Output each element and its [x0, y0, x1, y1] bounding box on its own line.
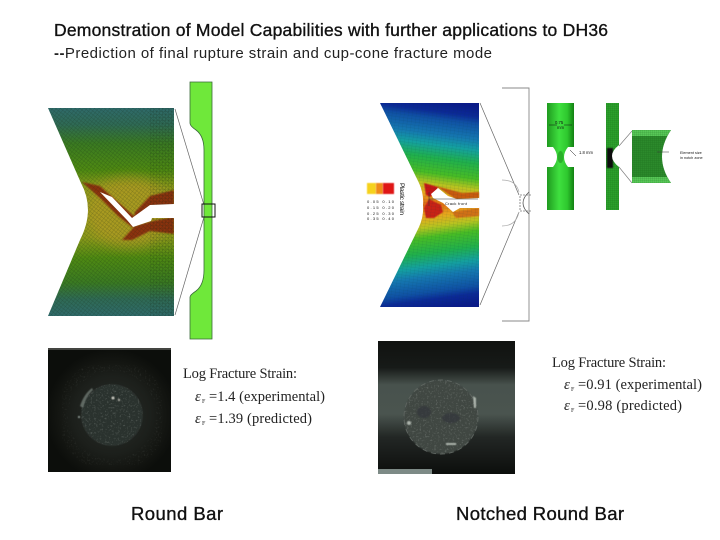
panel: notched round bar simulation: [367, 88, 703, 321]
plastic strain legend: 0.35 0.40: [367, 216, 395, 221]
round bar fracture strain text: =1.4 (experimental): [209, 389, 325, 405]
label: round bar: Round Bar: [131, 503, 223, 524]
notched round bar fracture strain text: Log Fracture Strain:: [552, 355, 666, 371]
title: Demonstration of Model Capabilities with further applications to DH36: [54, 20, 608, 40]
label: notched round bar: Notched Round Bar: [456, 503, 624, 524]
notched round bar fracture strain text: F: [571, 387, 575, 393]
plastic strain legend: [367, 183, 405, 221]
round bar fracture strain text: F: [202, 399, 206, 405]
round bar fracture strain text: ε: [195, 411, 201, 427]
notched round bar fracture strain text: =0.98 (predicted): [578, 398, 682, 414]
notched specimen, solid model: 1.8 mm: [579, 150, 593, 155]
round bar fracture strain text: ε: [195, 389, 201, 405]
guide lines to notch: [480, 103, 519, 305]
notched bar outline: [502, 88, 529, 321]
round bar specimen: [190, 82, 212, 339]
fracture photo: notched round bar: [378, 341, 515, 474]
notched round bar fracture strain text: ε: [564, 398, 570, 414]
plastic strain legend: 0.25 0.30: [367, 211, 395, 216]
panel: round bar simulation: [48, 82, 215, 339]
plastic strain legend: 0.05 0.10: [367, 199, 395, 204]
detail box: [202, 204, 215, 217]
notched specimen, solid model: mm: [557, 125, 564, 130]
plastic strain legend: Plastic strain: [398, 183, 405, 215]
mesh detail: [632, 130, 703, 183]
notched specimen, mesh section: [606, 103, 619, 210]
round bar fracture strain text: Log Fracture Strain:: [183, 366, 297, 382]
notched bar fracture mesh: [380, 103, 479, 307]
round bar fracture strain text: =1.39 (predicted): [209, 411, 312, 427]
round bar fracture mesh: [48, 108, 174, 316]
round bar fracture strain text: [183, 366, 325, 427]
notched specimen, solid model: [547, 103, 593, 210]
notched round bar fracture strain text: F: [571, 408, 575, 414]
plastic strain legend: 0.15 0.20: [367, 205, 395, 210]
guide lines to detail box: [175, 109, 204, 315]
fracture photo: round bar: [48, 348, 171, 472]
guide lines to mesh detail: [619, 131, 632, 183]
subtitle: --Prediction of final rupture strain and cup-cone fracture mode: [54, 45, 492, 62]
notched round bar fracture strain text: ε: [564, 377, 570, 393]
notch detail box: [520, 192, 531, 214]
notched bar fracture mesh: Crack front: [445, 201, 468, 206]
mesh detail: in notch zone: [680, 156, 703, 160]
round bar fracture strain text: F: [202, 421, 206, 427]
notched specimen, solid model: 0.75: [555, 120, 564, 125]
notched round bar fracture strain text: =0.91 (experimental): [578, 377, 702, 393]
notched round bar fracture strain text: [552, 355, 702, 414]
mesh detail: Element size: [680, 151, 702, 155]
